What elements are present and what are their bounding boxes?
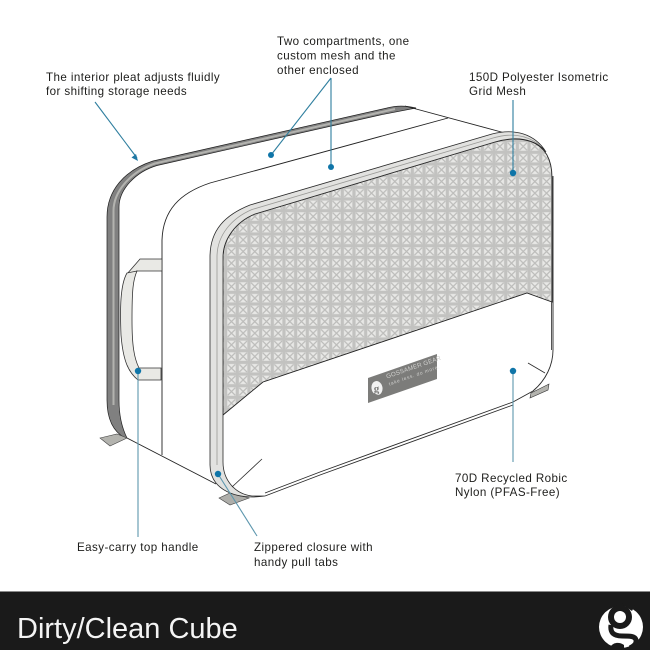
text: compartments: other enclosed <box>277 64 359 77</box>
back pleat <box>107 106 416 438</box>
zipper band <box>210 132 546 497</box>
front pull tab <box>219 493 249 505</box>
text: polyester mesh: 150D Polyester Isometric <box>469 71 609 84</box>
callout: interior pleat arrow <box>95 102 138 161</box>
footer title: Dirty/Clean Cube <box>17 613 238 645</box>
label text: take less. do more. <box>388 364 441 387</box>
callout: handle line <box>135 368 141 537</box>
cube product illustration <box>100 106 553 505</box>
left pull tab <box>100 434 127 446</box>
text: zippered closure: handy pull tabs <box>254 556 338 569</box>
footer bar <box>0 591 650 650</box>
text: compartments: custom mesh and the <box>277 50 396 62</box>
text: zippered closure: Zippered closure with <box>254 541 373 554</box>
callout: nylon line <box>510 368 516 462</box>
label logo <box>370 380 384 396</box>
footer logo <box>599 603 643 650</box>
callout: compartments lines <box>268 78 334 170</box>
text: polyester mesh: Grid Mesh <box>469 85 526 98</box>
callout: zipper line <box>215 471 257 536</box>
carry handle <box>121 259 162 380</box>
mesh panel <box>223 139 552 415</box>
right pull tab <box>530 384 549 398</box>
brand label: g <box>374 383 380 395</box>
text: compartments: Two compartments, one <box>277 35 410 48</box>
text: recycled nylon: Nylon (PFAS-Free) <box>455 486 560 499</box>
text: interior pleat: The interior pleat adjusts fluidly <box>46 71 220 84</box>
text: interior pleat: for shifting storage needs <box>46 85 187 98</box>
text: top handle: Easy-carry top handle <box>77 541 199 554</box>
text: recycled nylon: 70D Recycled Robic <box>455 472 568 485</box>
callout: mesh line <box>510 100 516 176</box>
label text: GOSSAMER GEAR <box>385 355 442 380</box>
brand label <box>368 354 445 403</box>
top seam lines <box>127 106 505 484</box>
front panel outline <box>232 176 553 496</box>
